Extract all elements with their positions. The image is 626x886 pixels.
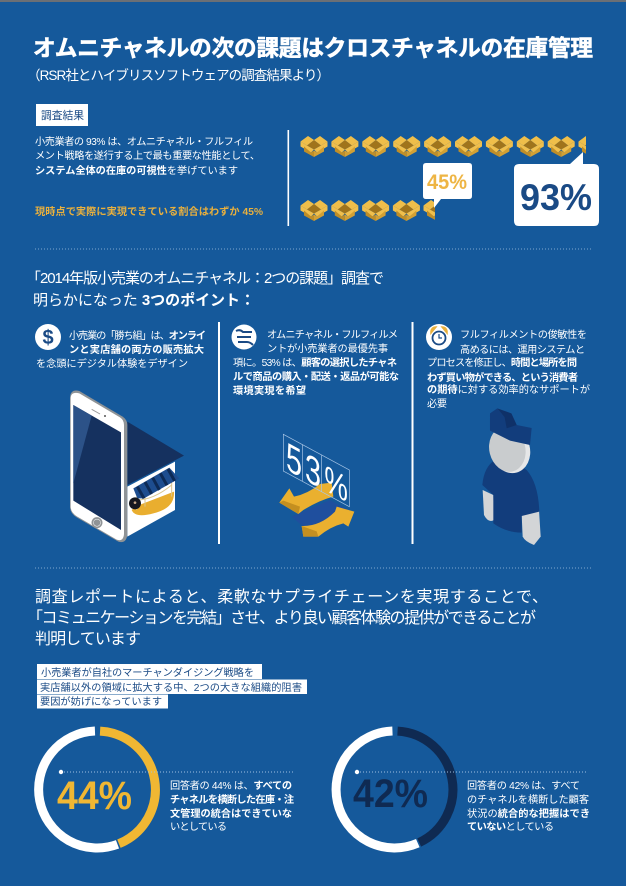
callout: organizational obstacles [37, 664, 307, 708]
text: point 3 [427, 328, 590, 410]
text: 42 percent finding: ていないとしている [467, 821, 554, 833]
text: point 3: 高めるには、運用システムと [460, 343, 585, 356]
text: 93 percent finding: 小売業者の 93% は、オムニチャネル・フルフィル [35, 135, 253, 148]
chart: 42 percent ring: 42% [353, 772, 428, 816]
chart: 42 percent ring [336, 731, 588, 848]
callout: organizational obstacles: 実店舗以外の領域に拡大する中、2つの大きな組織的阻害 [40, 681, 302, 694]
text: 42 percent finding: のチャネルを横断した顧客 [467, 793, 589, 806]
chart: 44 percent ring: 44% [57, 774, 132, 818]
text: 44 percent finding: チャネルを横断した在庫・注 [170, 793, 294, 806]
title: オムニチャネルの次の課題はクロスチャネルの在庫管理 [33, 36, 593, 61]
vertical divider [288, 130, 289, 226]
text: point 2: 項に。53% は、顧客の選択したチャネ [233, 356, 397, 369]
illustration: 53 percent with arrows: % [324, 458, 348, 511]
callout: 93 percent [514, 152, 599, 226]
heading: three points: 「2014年版小売業のオムニチャネル：2つの課題」調査で [26, 270, 384, 287]
illustration: 53 percent with arrows [279, 433, 354, 537]
panel: point 2 [232, 324, 399, 537]
callout: organizational obstacles: 小売業者が自社のマーチャンダイジング戦略を [41, 666, 254, 679]
text: point 1: を念頭にデジタル体験をデザイン [36, 357, 188, 370]
icon row: 93 percent boxes [300, 136, 606, 157]
label: survey results: 調査結果 [41, 108, 84, 122]
text: point 1: 小売業の「勝ち組」は、オンライ [69, 329, 206, 342]
text: point 3: プロセスを修正し、時間と場所を問 [427, 356, 577, 369]
panel: point 3 [426, 324, 590, 545]
panel: point 1 [35, 324, 206, 542]
callout: organizational obstacles: 要因が妨げになっています [40, 695, 162, 708]
text: point 3: 必要 [427, 397, 447, 410]
text block: report conclusion [27, 588, 548, 648]
text: point 2: 環境実現を希望 [233, 384, 306, 397]
text: point 2: オムニチャネル・フルフィルメ [267, 329, 398, 341]
text: point 3: の期待に対する効率的なサポートが [427, 383, 590, 396]
illustration: customer figure [482, 408, 541, 545]
label: survey results [36, 104, 88, 126]
text: point 3: フルフィルメントの俊敏性を [460, 328, 587, 341]
callout: 45 percent: 45% [427, 171, 467, 194]
section: survey results [35, 104, 263, 218]
text block: report conclusion: 調査レポートによると、柔軟なサプライチェーンを実現することで、 [35, 588, 548, 606]
icon: alarm clock [426, 324, 452, 350]
text: 93 percent finding: システム全体の在庫の可視性を挙げています [35, 164, 238, 177]
text: point 2 [233, 329, 399, 397]
text: point 1 [36, 329, 206, 370]
text block: report conclusion: 「コミュニケーションを完結」させ、より良い顧客体験の提供ができることが [27, 609, 536, 627]
subtitle: （RSR社とハイブリスソフトウェアの調査結果より） [27, 67, 330, 83]
text: 93 percent finding: メント戦略を遂行する上で最も重要な性能として、 [35, 149, 260, 162]
text: 42 percent finding: 状況の統合的な把握はでき [467, 807, 590, 820]
text: point 2: ルで商品の購入・配送・返品が可能な [233, 370, 399, 383]
illustration: phone and store [70, 391, 184, 542]
heading: three points [26, 270, 384, 309]
callout: 93 percent: 93% [520, 177, 592, 218]
text: 44 percent finding [170, 779, 294, 833]
icon: dollar: $ [42, 327, 54, 349]
text: 44 percent finding: 文管理の統合はできていな [170, 807, 292, 820]
text block: report conclusion: 判明しています [35, 630, 141, 648]
text: 42 percent finding: 回答者の 42% は、すべて [467, 779, 580, 792]
text: 42 percent finding [467, 779, 590, 833]
callout: 45 percent [423, 163, 472, 208]
text: 44 percent finding: いとしている [170, 821, 227, 833]
text: 93 percent finding [35, 135, 260, 177]
icon row: 45 percent boxes [300, 200, 435, 221]
text: point 3: わず買い物ができる、という消費者 [427, 371, 578, 384]
illustration: 53 percent with arrows: 5 [286, 433, 302, 487]
text: point 1: ンと実店舗の両方の販売拡大 [69, 343, 204, 356]
text: point 2: ントが小売業者の最優先事 [267, 342, 388, 355]
heading: three points: 明らかになった 3つのポイント： [33, 292, 255, 309]
icon: channel arrows [232, 324, 256, 350]
illustration: 53 percent with arrows: 3 [305, 444, 321, 497]
text: 45 percent finding: 現時点で実際に実現できている割合はわずか 45% [35, 205, 263, 218]
icon: dollar [35, 324, 61, 350]
chart: 44 percent ring [39, 731, 293, 848]
text: 44 percent finding: 回答者の 44% は、すべての [170, 779, 292, 792]
